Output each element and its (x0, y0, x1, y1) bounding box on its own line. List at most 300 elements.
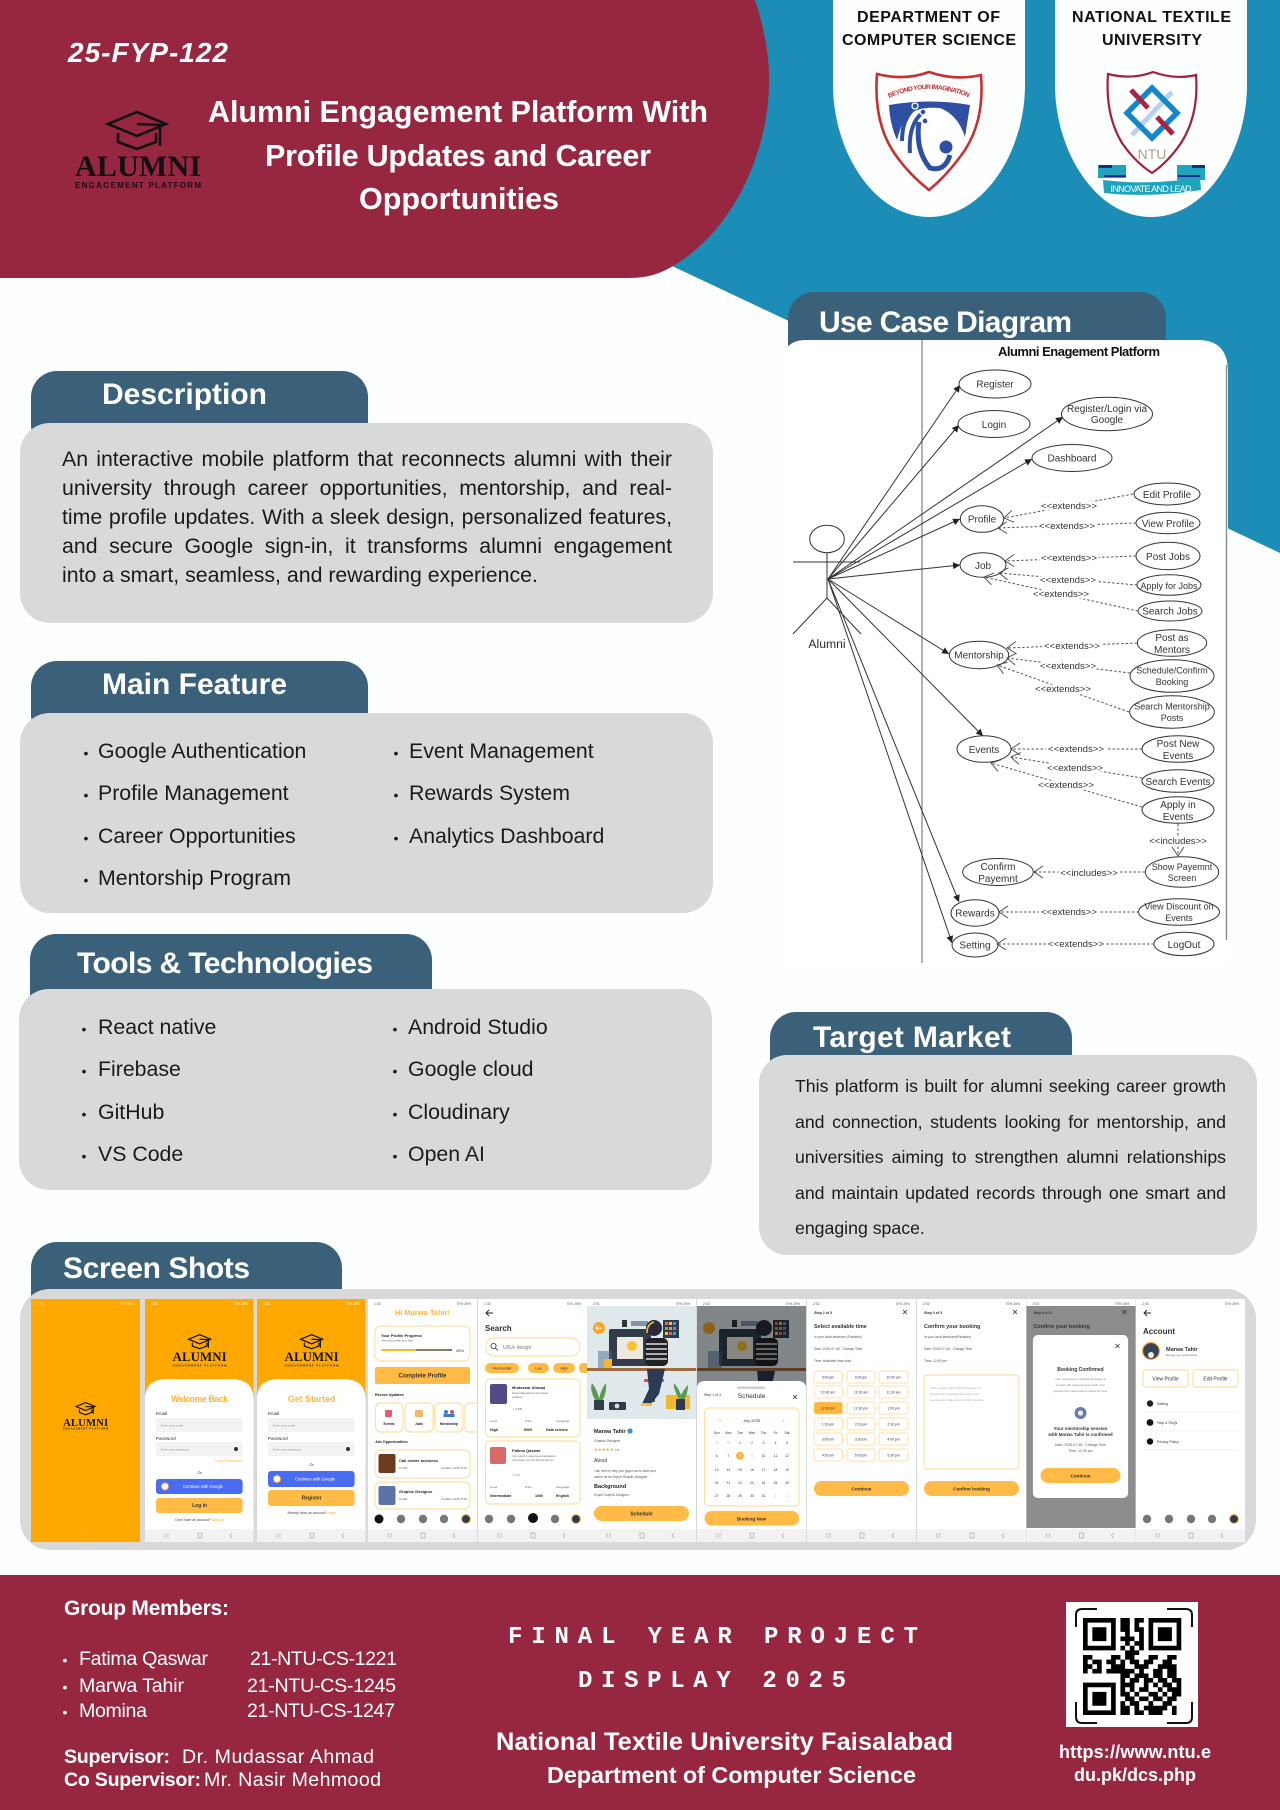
feature list column 1: Mentorship Program (98, 866, 291, 890)
screenshot: booking confirmed: booked. Be prepared and ready your (1056, 1383, 1105, 1387)
feature list column 1 (84, 739, 306, 890)
screenshot: booking confirmed: Step 3 of 3 (1034, 1311, 1052, 1315)
screenshot: mentor profile: Graphic Designer (594, 1439, 621, 1443)
target market heading: Target Market (813, 1021, 1011, 1054)
screenshot: search: Language (556, 1485, 570, 1489)
badge: department of computer science: COMPUTER SCIENCE (842, 32, 1016, 49)
use case ellipses: Screen (1168, 873, 1196, 883)
university and department (496, 1728, 953, 1788)
panel: main feature (20, 661, 713, 913)
use case ellipses: Register/Login via (1067, 404, 1147, 415)
screenshot: welcome back: 1:20 (151, 1302, 158, 1306)
group members: Marwa Tahir (79, 1675, 184, 1697)
screenshot: home dashboard: Pro/Me (399, 1497, 408, 1501)
screenshot: schedule calendar: 25 (774, 1481, 777, 1485)
screenshot: welcome back: Continue with Google (183, 1484, 224, 1489)
project code: 25-FYP-122 (67, 37, 228, 68)
use case ellipses: View Discount on (1144, 902, 1214, 912)
screenshot: home dashboard: Jobs (415, 1422, 423, 1426)
screenshot: select time: Date: 2025-07-08 - Change Time (814, 1347, 862, 1351)
screenshot: home dashboard: 45% (456, 1348, 464, 1353)
supervisors: Dr. Mudassar Ahmad (182, 1746, 374, 1768)
screenshot: search: 70% 25% (566, 1302, 581, 1306)
screenshot: schedule calendar: July 2025 (743, 1418, 761, 1423)
screenshot: select time: 12:00 pm (821, 1406, 835, 1410)
use case ellipses: Events (969, 745, 999, 756)
header banner (0, 0, 769, 278)
use case ellipses: Post as (1155, 633, 1189, 644)
screenshot: search: English (556, 1494, 569, 1498)
screenshot: select time: 9:00 am (822, 1376, 834, 1380)
group members: 21-NTU-CS-1245 (247, 1675, 396, 1697)
screenshot: mentor profile: 2:01 (593, 1302, 600, 1306)
group members (62, 1597, 397, 1722)
screenshot: welcome back: Email (156, 1411, 167, 1416)
screenshot: schedule calendar: 21 (726, 1481, 730, 1485)
screenshot: search: guidance (512, 1395, 523, 1399)
use case ellipses (949, 370, 1220, 957)
use case ellipses: Dashboard (1048, 454, 1096, 464)
project title (208, 95, 708, 216)
feature list column 1: • (84, 830, 88, 846)
screenshot: schedule calendar: 18 (774, 1468, 777, 1472)
screenshot: schedule calendar: 28 (726, 1494, 730, 1498)
screenshot: schedule calendar: 2 (751, 1441, 753, 1445)
screenshot: select time: 10:00 am (886, 1376, 901, 1380)
feature list column 1: • (84, 872, 88, 888)
screenshot: schedule calendar: 30 (726, 1441, 730, 1445)
screen shots heading (31, 1242, 342, 1322)
use case ellipses: Events (1163, 751, 1193, 762)
screenshot: mentor profile (587, 1299, 696, 1542)
supervisors: Mr. Nasir Mehmood (204, 1769, 381, 1791)
use case ellipses: View Profile (1142, 519, 1195, 530)
group members: 21-NTU-CS-1221 (250, 1648, 397, 1670)
screenshot: schedule calendar: 29 (715, 1441, 719, 1445)
feature list column 2: • (394, 830, 398, 846)
extends and includes relations: <<extends>> (1039, 521, 1095, 532)
extends and includes relations (984, 494, 1207, 950)
project title: Profile Updates and Career (265, 139, 651, 173)
screenshot: select time: 9:30 am (855, 1376, 867, 1380)
screenshot: schedule calendar: Wed (749, 1431, 756, 1435)
screenshot: mentor profile: I am here to help you guys how to start your (594, 1469, 657, 1473)
supervisors: Co Supervisor: (64, 1769, 201, 1791)
screenshot: get started: Enter your password (273, 1448, 301, 1452)
use case ellipses: Posts (1161, 713, 1184, 723)
use case ellipses: Search Events (1145, 777, 1211, 788)
screenshot: schedule calendar: 22 (738, 1481, 742, 1485)
screenshot: home dashboard: Hi Marwa Tahir! (395, 1308, 450, 1317)
screenshot: mentor profile: About (594, 1458, 608, 1464)
use case ellipses: Search Jobs (1142, 606, 1198, 618)
screenshot: select time: Select available time (814, 1324, 867, 1330)
use case ellipses: Google (1091, 415, 1124, 426)
badge: national textile university: NATIONAL TEXTILE (1072, 9, 1231, 26)
use case ellipses: Edit Profile (1143, 490, 1192, 501)
use case ellipses: Payemnt (978, 874, 1018, 885)
screenshot: schedule calendar: 31 (762, 1494, 765, 1498)
screenshot: select time: 4:00 pm (887, 1438, 900, 1442)
tools list column 1: GitHub (98, 1100, 164, 1124)
screenshot: select time: 3:00 pm (822, 1438, 834, 1442)
screenshot: search: I am expert in personal and education (512, 1454, 556, 1458)
screenshot: select time: 12:30 pm (854, 1406, 868, 1410)
header logo: alumni engagement platform: ALUMNI (75, 150, 201, 183)
screenshot: welcome back: Enter your password (161, 1448, 189, 1452)
QR code (1066, 1602, 1198, 1727)
screenshot: schedule calendar: Sat (785, 1431, 790, 1435)
screenshot: account: Help & FAQs (1157, 1421, 1177, 1425)
feature list column 1: • (84, 787, 88, 803)
screenshot: confirm booking: 2:03 (923, 1302, 930, 1306)
tools list column 2: • (392, 1106, 398, 1122)
screenshot: select time: Time: Available time slots (814, 1359, 851, 1363)
university and department: Department of Computer Science (547, 1762, 916, 1788)
badge: department of computer science: DEPARTMENT OF (857, 9, 1000, 26)
screenshot: get started: 70% 25% (345, 1302, 360, 1306)
screenshot: schedule calendar: 11 (774, 1454, 777, 1458)
screenshot: home dashboard: Job Opportunities (375, 1440, 408, 1444)
panel: target market: engaging space. (795, 1218, 925, 1238)
tools list column 1: Firebase (98, 1057, 181, 1081)
screenshot: confirm booking: Confirm booking (953, 1486, 990, 1492)
screenshot: booking confirmed (1026, 1299, 1136, 1542)
screenshot: search: Search (485, 1324, 512, 1333)
screenshot: booking confirmed: Continue (1071, 1474, 1091, 1478)
screenshot: schedule calendar: 13 (715, 1468, 719, 1472)
website url: https://www.ntu.e (1059, 1742, 1211, 1762)
screenshot: schedule calendar: 15 (738, 1468, 742, 1472)
screenshot: mentor profile: Background (594, 1484, 626, 1490)
screenshot: schedule calendar: 2:02 (703, 1302, 710, 1306)
screenshot: get started: Password (268, 1436, 288, 1441)
screenshot: get started (257, 1299, 366, 1542)
screenshot: schedule calendar: Thu (761, 1431, 767, 1435)
group members: Fatima Qaswar (79, 1648, 208, 1670)
extends and includes relations: <<extends>> (1040, 575, 1096, 586)
screenshot: mentor profile: Marwa Tahir (594, 1429, 627, 1435)
screenshot: home dashboard: Your Profile Progress (381, 1333, 423, 1338)
screenshot: get started: Enter your email (273, 1424, 295, 1428)
tools list column 2: Open AI (408, 1142, 485, 1166)
group members: 21-NTU-CS-1247 (247, 1700, 395, 1722)
screenshot: select time: 5:00 pm (855, 1454, 867, 1458)
panel: description: and secure Google sign-in, it transforms alumni engagement (62, 534, 672, 558)
screenshot: welcome back: Forgot Password? (215, 1459, 243, 1463)
use case ellipses: Show Payemnt (1152, 862, 1213, 872)
screenshot: search: High (561, 1367, 568, 1371)
screenshot: schedule calendar: 9 (751, 1454, 753, 1458)
screenshot: search: 1:30 (484, 1302, 491, 1306)
badge: national textile university: UNIVERSITY (1102, 32, 1202, 49)
badge: national textile university (1055, 0, 1247, 217)
screenshot: schedule calendar: Sun (714, 1431, 720, 1435)
screenshot: schedule calendar: 30 (750, 1494, 754, 1498)
screenshot: search: Expert data science and career (512, 1391, 548, 1395)
badge: department of computer science (833, 0, 1025, 217)
extends and includes relations: <<extends>> (1038, 780, 1094, 791)
screenshot: home dashboard: Graphic Designer (399, 1489, 433, 1494)
use case ellipses: Events (1163, 812, 1193, 823)
screenshot: search: Fatima Qaswar (512, 1448, 541, 1453)
panel: target market: This platform is built for alumni seeking career growth (795, 1076, 1226, 1096)
screenshot: home dashboard: Mentorship (440, 1422, 458, 1426)
group members: Momina (79, 1700, 147, 1722)
screenshot: schedule calendar (697, 1299, 806, 1542)
use case ellipses: Setting (959, 940, 991, 952)
tools list column 1: VS Code (98, 1142, 183, 1166)
group members: • (62, 1704, 68, 1720)
screenshot: booking confirmed: with Marwa Tahir is confirmed (1047, 1432, 1113, 1437)
screenshot: welcome back: Enter your email (161, 1424, 183, 1428)
screenshot: search: Intermediate (493, 1367, 512, 1371)
screenshot: confirm booking: In your local timezone(Pakistan) (924, 1335, 971, 1339)
extends and includes relations: <<extends>> (1048, 744, 1104, 755)
screenshot: welcome back: ALUMNI (173, 1350, 227, 1364)
screenshot: schedule calendar: 14 (726, 1468, 730, 1472)
screenshot: schedule calendar: 17 (762, 1468, 765, 1472)
screenshot: schedule calendar: ‹ (719, 1418, 721, 1423)
extends and includes relations: <<extends>> (1035, 684, 1091, 695)
tools heading: Tools & Technologies (77, 947, 373, 980)
screenshot: search: Intermediate (490, 1494, 511, 1498)
extends and includes relations: <<extends>> (1041, 553, 1097, 564)
supervisors (64, 1746, 381, 1791)
extends and includes relations: <<extends>> (1033, 589, 1089, 600)
panel: description: into a smart, seamless, and rewarding experience. (62, 563, 538, 587)
project title: Opportunities (359, 182, 559, 216)
screenshot: confirm booking (917, 1299, 1026, 1542)
screenshot: schedule calendar: 1 (739, 1441, 741, 1445)
group members: • (62, 1679, 68, 1695)
panel: screen shots (20, 1242, 1256, 1550)
screenshot: account: Edit Profile (1203, 1376, 1228, 1382)
screenshot: welcome back: 70% 25% (233, 1302, 248, 1306)
screenshot: schedule calendar: 23 (750, 1481, 754, 1485)
screenshot: search: Level (490, 1485, 498, 1489)
screenshot: schedule calendar: 12 (785, 1454, 789, 1458)
screenshot: search: Level (490, 1419, 498, 1423)
screenshot: home dashboard: Recent Updates (375, 1393, 404, 1397)
screenshot: account: Privacy Policy (1157, 1440, 1179, 1444)
screenshot: mentor profile: ★★★★★ 4.5 (594, 1447, 619, 1452)
extends and includes relations: <<includes>> (1149, 836, 1207, 847)
extends and includes relations: <<extends>> (1041, 501, 1097, 512)
screenshot: search: mentorship you can discuss with me (512, 1458, 554, 1462)
tools list column 1: • (82, 1148, 86, 1164)
main feature heading: Main Feature (102, 668, 287, 701)
target market heading (770, 1012, 1072, 1087)
screenshot: welcome back: Log in (192, 1503, 207, 1509)
tools list column 2 (392, 1015, 548, 1166)
screenshot: select time: 10:30 am (821, 1390, 835, 1394)
icon: NTU shield: NTU (1138, 146, 1166, 162)
use case actor: alumni: Alumni (808, 637, 846, 651)
screenshot: welcome back: Password (156, 1436, 176, 1441)
screenshot: schedule calendar: 16 (750, 1468, 754, 1472)
screenshot: select time: 4:30 pm (822, 1454, 834, 1458)
screenshot: booking confirmed: Date: 2025-07-08 - Change Time (1055, 1443, 1106, 1447)
screenshot: search: ★ 4.5/5 (512, 1407, 523, 1411)
screenshot: select time: 2:02 (813, 1302, 820, 1306)
university and department: National Textile University Faisalabad (496, 1728, 953, 1756)
screenshot: schedule calendar: 3 (763, 1441, 765, 1445)
tools list column 2: • (392, 1021, 398, 1037)
feature list column 2: Analytics Dashboard (409, 824, 604, 848)
feature list column 1: Google Authentication (98, 739, 306, 763)
group members: • (62, 1652, 68, 1668)
screenshot: schedule calendar: 1 (775, 1494, 777, 1498)
screenshot: select time: 2:30 pm (887, 1422, 900, 1426)
tools list column 2: Google cloud (408, 1057, 534, 1081)
screenshot: schedule calendar: Mon (725, 1431, 732, 1435)
project title: Alumni Engagement Platform With (208, 95, 708, 129)
feature list column 1: Profile Management (98, 781, 289, 805)
screenshot: booking confirmed: Your meeting is in Graphic Designer is (1055, 1377, 1106, 1381)
use case ellipses: Events (1165, 913, 1193, 923)
screenshot: schedule calendar: 8 (739, 1454, 741, 1458)
screenshot: schedule calendar: 24 (762, 1481, 765, 1485)
screenshot: confirm booking: 70% 25% (1005, 1302, 1020, 1306)
screenshot: welcome back: Don't have an account? Sign Up (175, 1518, 224, 1522)
screenshot: booking confirmed: Booking Confirmed (1057, 1367, 1104, 1373)
screenshot: search (478, 1299, 587, 1542)
screenshot: schedule calendar: 70% 25% (785, 1302, 800, 1306)
screenshot: account: Marwa Tahir (1166, 1347, 1199, 1353)
screenshot: confirm booking: Confirm your booking (924, 1324, 980, 1330)
screenshot: home dashboard (368, 1299, 477, 1542)
screenshot: select time: 1:00 pm (887, 1406, 900, 1410)
screenshot: get started: Continue with Google (295, 1476, 336, 1482)
screenshot: account (1136, 1299, 1245, 1542)
feature list column 1: Career Opportunities (98, 824, 296, 848)
screenshot: home dashboard: 70% 25% (456, 1302, 471, 1306)
description heading: Description (102, 378, 267, 411)
screenshot: booking confirmed: 70% 25% (1115, 1302, 1130, 1306)
use case ellipses: Profile (968, 514, 997, 526)
screenshot: select time: Continue (852, 1486, 872, 1492)
screenshot: confirm booking: Step 3 of 3 (924, 1311, 942, 1315)
screenshot: home dashboard: Keep your profile up to date (381, 1338, 413, 1342)
website url: du.pk/dcs.php (1074, 1765, 1196, 1785)
screenshot: schedule calendar: 19 (785, 1468, 789, 1472)
screenshot: search: Language (556, 1419, 570, 1423)
screenshot: splash: ENGAGEMENT PLATFORM (63, 1428, 108, 1430)
screenshot: confirm booking: Your meeting with Graphic Designer is (930, 1386, 981, 1390)
feature list column 2: Rewards System (409, 781, 570, 805)
screenshot: welcome back: Or (197, 1470, 202, 1475)
actor associations (828, 385, 1063, 943)
extends and includes relations: <<extends>> (1048, 939, 1104, 950)
screenshot: search: Low (535, 1367, 542, 1371)
screenshot: schedule calendar: 29 (738, 1494, 742, 1498)
screenshot: schedule calendar: 7 (727, 1454, 729, 1458)
use case ellipses: Register (976, 380, 1014, 390)
tools list column 1: • (82, 1021, 86, 1037)
panel: description (20, 371, 713, 623)
tools list column 2: Cloudinary (408, 1100, 510, 1124)
illustration: designer at desk (587, 1306, 696, 1419)
panel: description: time profile updates. With a sleek design, personalized features, (62, 505, 672, 529)
tools list column 1: • (82, 1106, 86, 1122)
screenshot: welcome back: ENGAGEMENT PLATFORM (173, 1363, 227, 1367)
tools list column 1: React native (98, 1015, 216, 1039)
screenshot: schedule calendar: 6 (716, 1454, 718, 1458)
extends and includes relations: <<extends>> (1041, 907, 1097, 918)
use case ellipses: Apply for Jobs (1140, 581, 1198, 591)
screenshot: schedule calendar: Step 1 of 3 (704, 1393, 721, 1397)
description heading (31, 371, 368, 451)
screenshot: schedule calendar: 4 (775, 1441, 777, 1445)
icon: department shield: BEYOND YOUR IMAGINATION (888, 84, 970, 98)
screenshot: booking confirmed: Confirm your booking (1034, 1324, 1090, 1330)
screenshot: get started: 1:20 (263, 1302, 270, 1306)
screenshot: home dashboard: Pro/Me (399, 1466, 408, 1470)
icon: NTU shield: INNOVATE AND LEAD (1110, 184, 1192, 194)
screenshot: schedule calendar: Fri (774, 1431, 778, 1435)
screenshot: home dashboard: 1:30 (374, 1302, 381, 1306)
event title: DISPLAY 2025 (578, 1668, 846, 1695)
screenshot: get started: Email (268, 1411, 279, 1416)
use case ellipses: Mentorship (954, 650, 1004, 662)
screenshot: booking confirmed: 2:03 (1032, 1302, 1039, 1306)
screenshot: account: Manage your profile details (1166, 1353, 1198, 1357)
screenshot: schedule calendar: 20 (715, 1481, 719, 1485)
screenshot: get started: Get Started (288, 1394, 335, 1404)
website url (1059, 1742, 1211, 1785)
screenshot: select time: 2:00 pm (855, 1422, 867, 1426)
supervisors: Supervisor: (64, 1746, 170, 1768)
screenshot: select time: 11:30 am (887, 1390, 901, 1394)
panel: use case diagram: Alumni Enagement Platform (998, 344, 1160, 359)
panel: description: university through career opportunities, mentorship, and real- (62, 476, 672, 500)
screenshot: account: View Profile (1152, 1376, 1179, 1382)
use case ellipses: Apply in (1160, 800, 1196, 811)
feature list column 2: Event Management (409, 739, 594, 763)
panel: target market (759, 1012, 1257, 1255)
event title: FINAL YEAR PROJECT (508, 1624, 918, 1651)
screenshot: welcome back: Welcome Back (171, 1394, 228, 1404)
screenshot: booking confirmed: Time: 12:30 pm (1068, 1449, 1093, 1453)
screenshot: search: Ui/Ux design (503, 1345, 532, 1351)
screenshot: account: 70% 25% (1224, 1302, 1239, 1306)
screenshot: mentor profile: career as an Expert Graphic Designer. (594, 1475, 648, 1479)
screenshot: confirm booking: Date: 2025-07-08 - Change Time (924, 1347, 972, 1351)
feature list column 2 (394, 739, 604, 848)
use case ellipses: Booking (1156, 677, 1188, 687)
screenshot: get started: Already have an account? Login (287, 1511, 336, 1515)
use case ellipses: Post Jobs (1146, 552, 1190, 563)
screenshot: mentor profile: Schedule (630, 1512, 653, 1518)
screenshot: schedule calendar: 26 (785, 1481, 789, 1485)
screenshot: splash: 1:33 (37, 1302, 44, 1306)
panel: target market: and maintain updated records through one smart and (795, 1182, 1226, 1202)
screenshot: schedule calendar: 10 (762, 1454, 765, 1458)
screenshot: home dashboard: Complete Profile (399, 1374, 447, 1380)
group members: Group Members: (64, 1597, 229, 1620)
screenshot: schedule calendar: 2 (786, 1494, 788, 1498)
screenshot: home dashboard: Deadline: 2025-05-02 (441, 1466, 467, 1470)
feature list column 2: • (394, 745, 398, 761)
panel: description: An interactive mobile platform that reconnects alumni with their (62, 447, 672, 471)
footer band (0, 1575, 1280, 1810)
extends and includes relations: <<includes>> (1060, 868, 1118, 879)
screenshot: select time: Step 2 of 3 (814, 1311, 832, 1315)
tools heading (30, 934, 432, 1019)
use case ellipses: Post New (1157, 739, 1200, 750)
screenshot: schedule calendar: 5 (786, 1441, 788, 1445)
